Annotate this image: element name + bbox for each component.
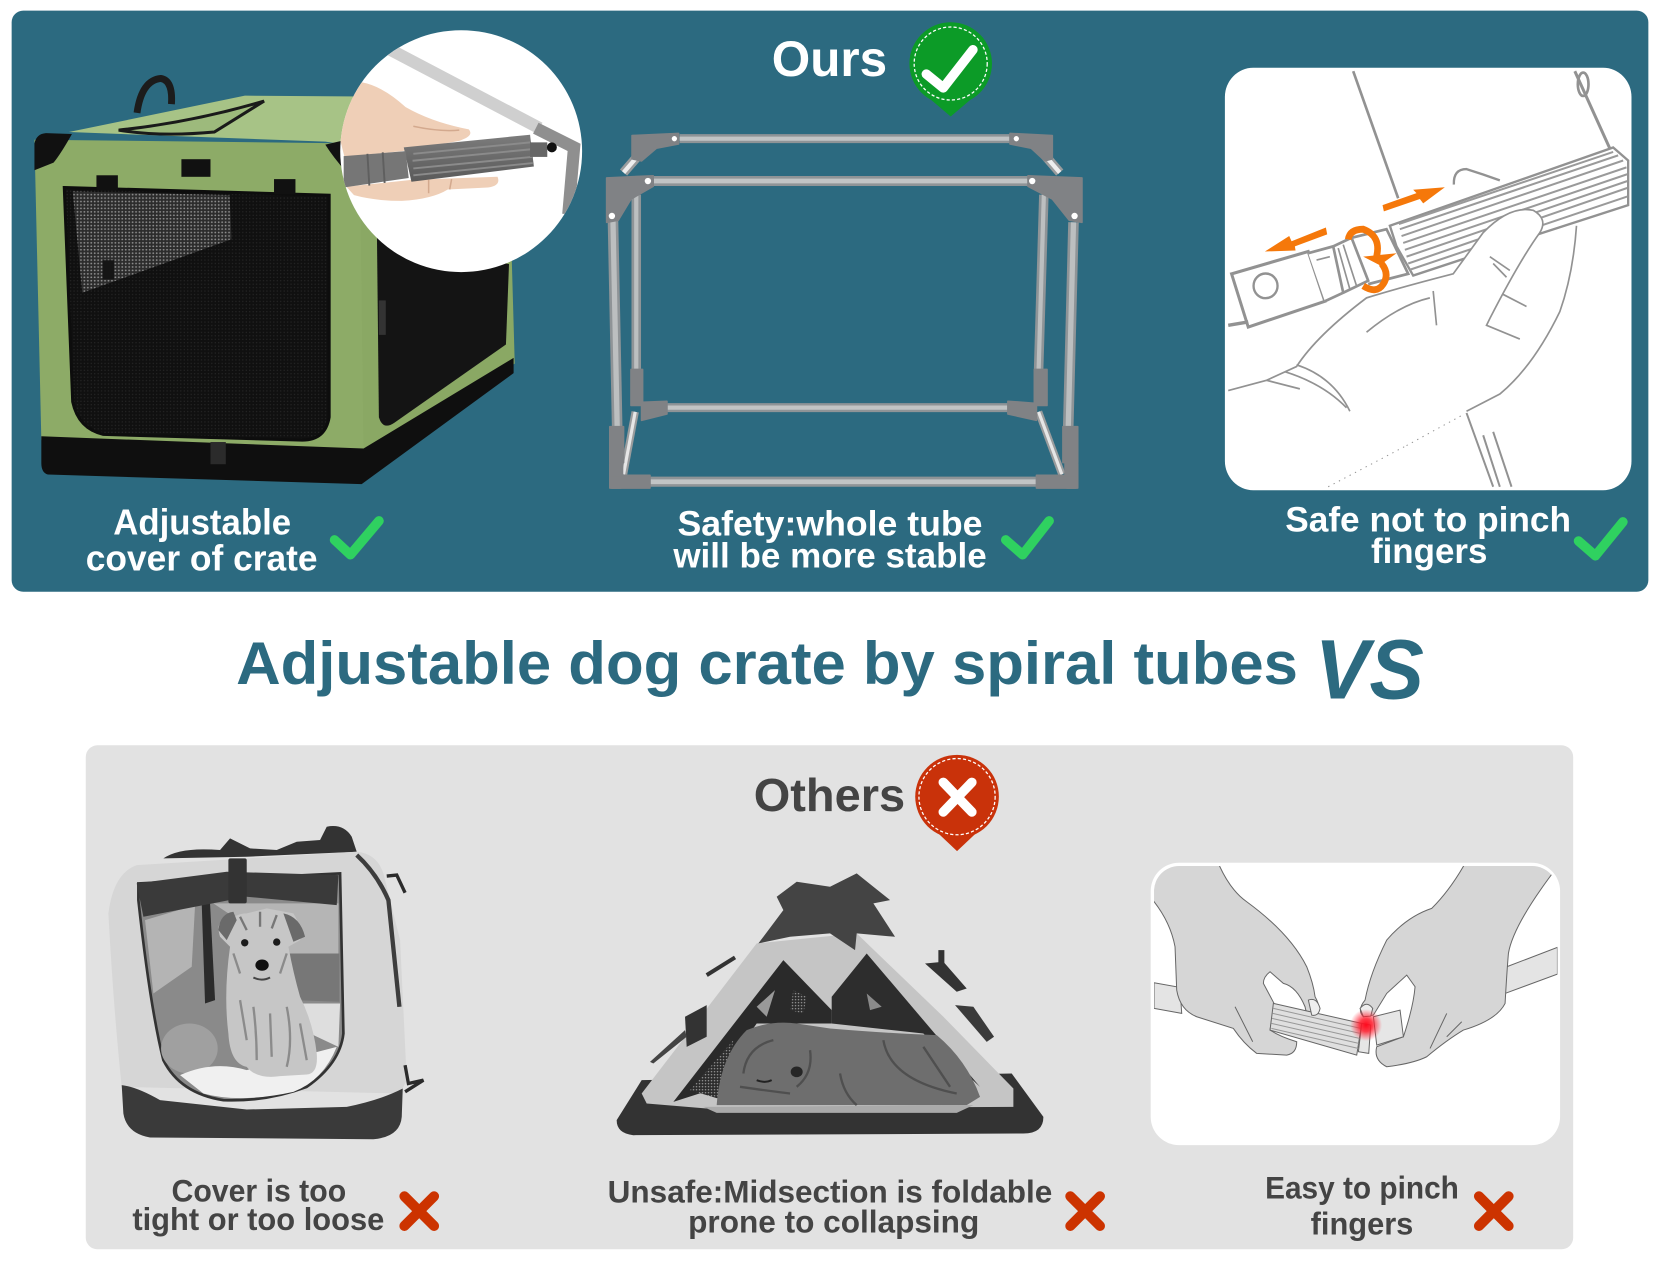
title: Adjustable dog crate by spiral tubes xyxy=(236,629,1298,697)
inset circle: hand adjusting tube xyxy=(339,30,582,272)
caption: easy to pinch: fingers xyxy=(1311,1205,1413,1241)
caption: unsafe midsection xyxy=(608,1174,1052,1239)
photo card: safe tube line drawing xyxy=(1225,68,1631,490)
photo: green adjustable crate xyxy=(34,78,515,484)
caption: cover too tight: tight or too loose xyxy=(132,1201,384,1237)
heading: ours: Ours xyxy=(772,31,887,87)
icon: green check mark xyxy=(335,521,379,555)
caption: safe not to pinch: fingers xyxy=(1371,532,1487,571)
caption: adjustable cover: cover of crate xyxy=(86,538,318,579)
caption: safety whole tube: will be more stable xyxy=(672,536,987,575)
caption: safety whole tube: Safety:whole tube xyxy=(678,505,982,544)
caption: cover too tight xyxy=(132,1173,384,1237)
heading: others: Others xyxy=(754,769,905,821)
caption: unsafe midsection: Unsafe:Midsection is foldable xyxy=(608,1174,1052,1210)
caption: unsafe midsection: prone to collapsing xyxy=(688,1203,979,1239)
caption: adjustable cover: Adjustable xyxy=(113,502,291,543)
caption: cover too tight: Cover is too xyxy=(172,1173,346,1209)
icon: green check mark xyxy=(1578,522,1623,556)
photo card: pinch hands line drawing xyxy=(1150,863,1560,1145)
panel: others xyxy=(86,745,1573,1249)
photo: grey crate with small dog xyxy=(108,826,423,1139)
caption: safety whole tube xyxy=(672,505,987,575)
chart: metal tube frame xyxy=(607,133,1082,488)
title xyxy=(236,622,1424,717)
icon: red cross badge xyxy=(915,755,999,851)
photo: collapsed tent with sleeping dog xyxy=(617,873,1043,1135)
panel: ours xyxy=(12,11,1648,592)
icon: red cross xyxy=(404,1196,434,1226)
caption: safe not to pinch xyxy=(1285,500,1571,571)
icon: green check badge xyxy=(909,22,992,116)
caption: safe not to pinch: Safe not to pinch xyxy=(1285,500,1571,539)
caption: easy to pinch xyxy=(1265,1169,1459,1241)
caption: easy to pinch: Easy to pinch xyxy=(1265,1169,1459,1205)
title: VS xyxy=(1315,622,1424,717)
icon: green check mark xyxy=(1006,521,1049,555)
icon: red cross xyxy=(1479,1196,1509,1226)
icon: red cross xyxy=(1070,1196,1100,1226)
caption: adjustable cover xyxy=(86,502,318,579)
